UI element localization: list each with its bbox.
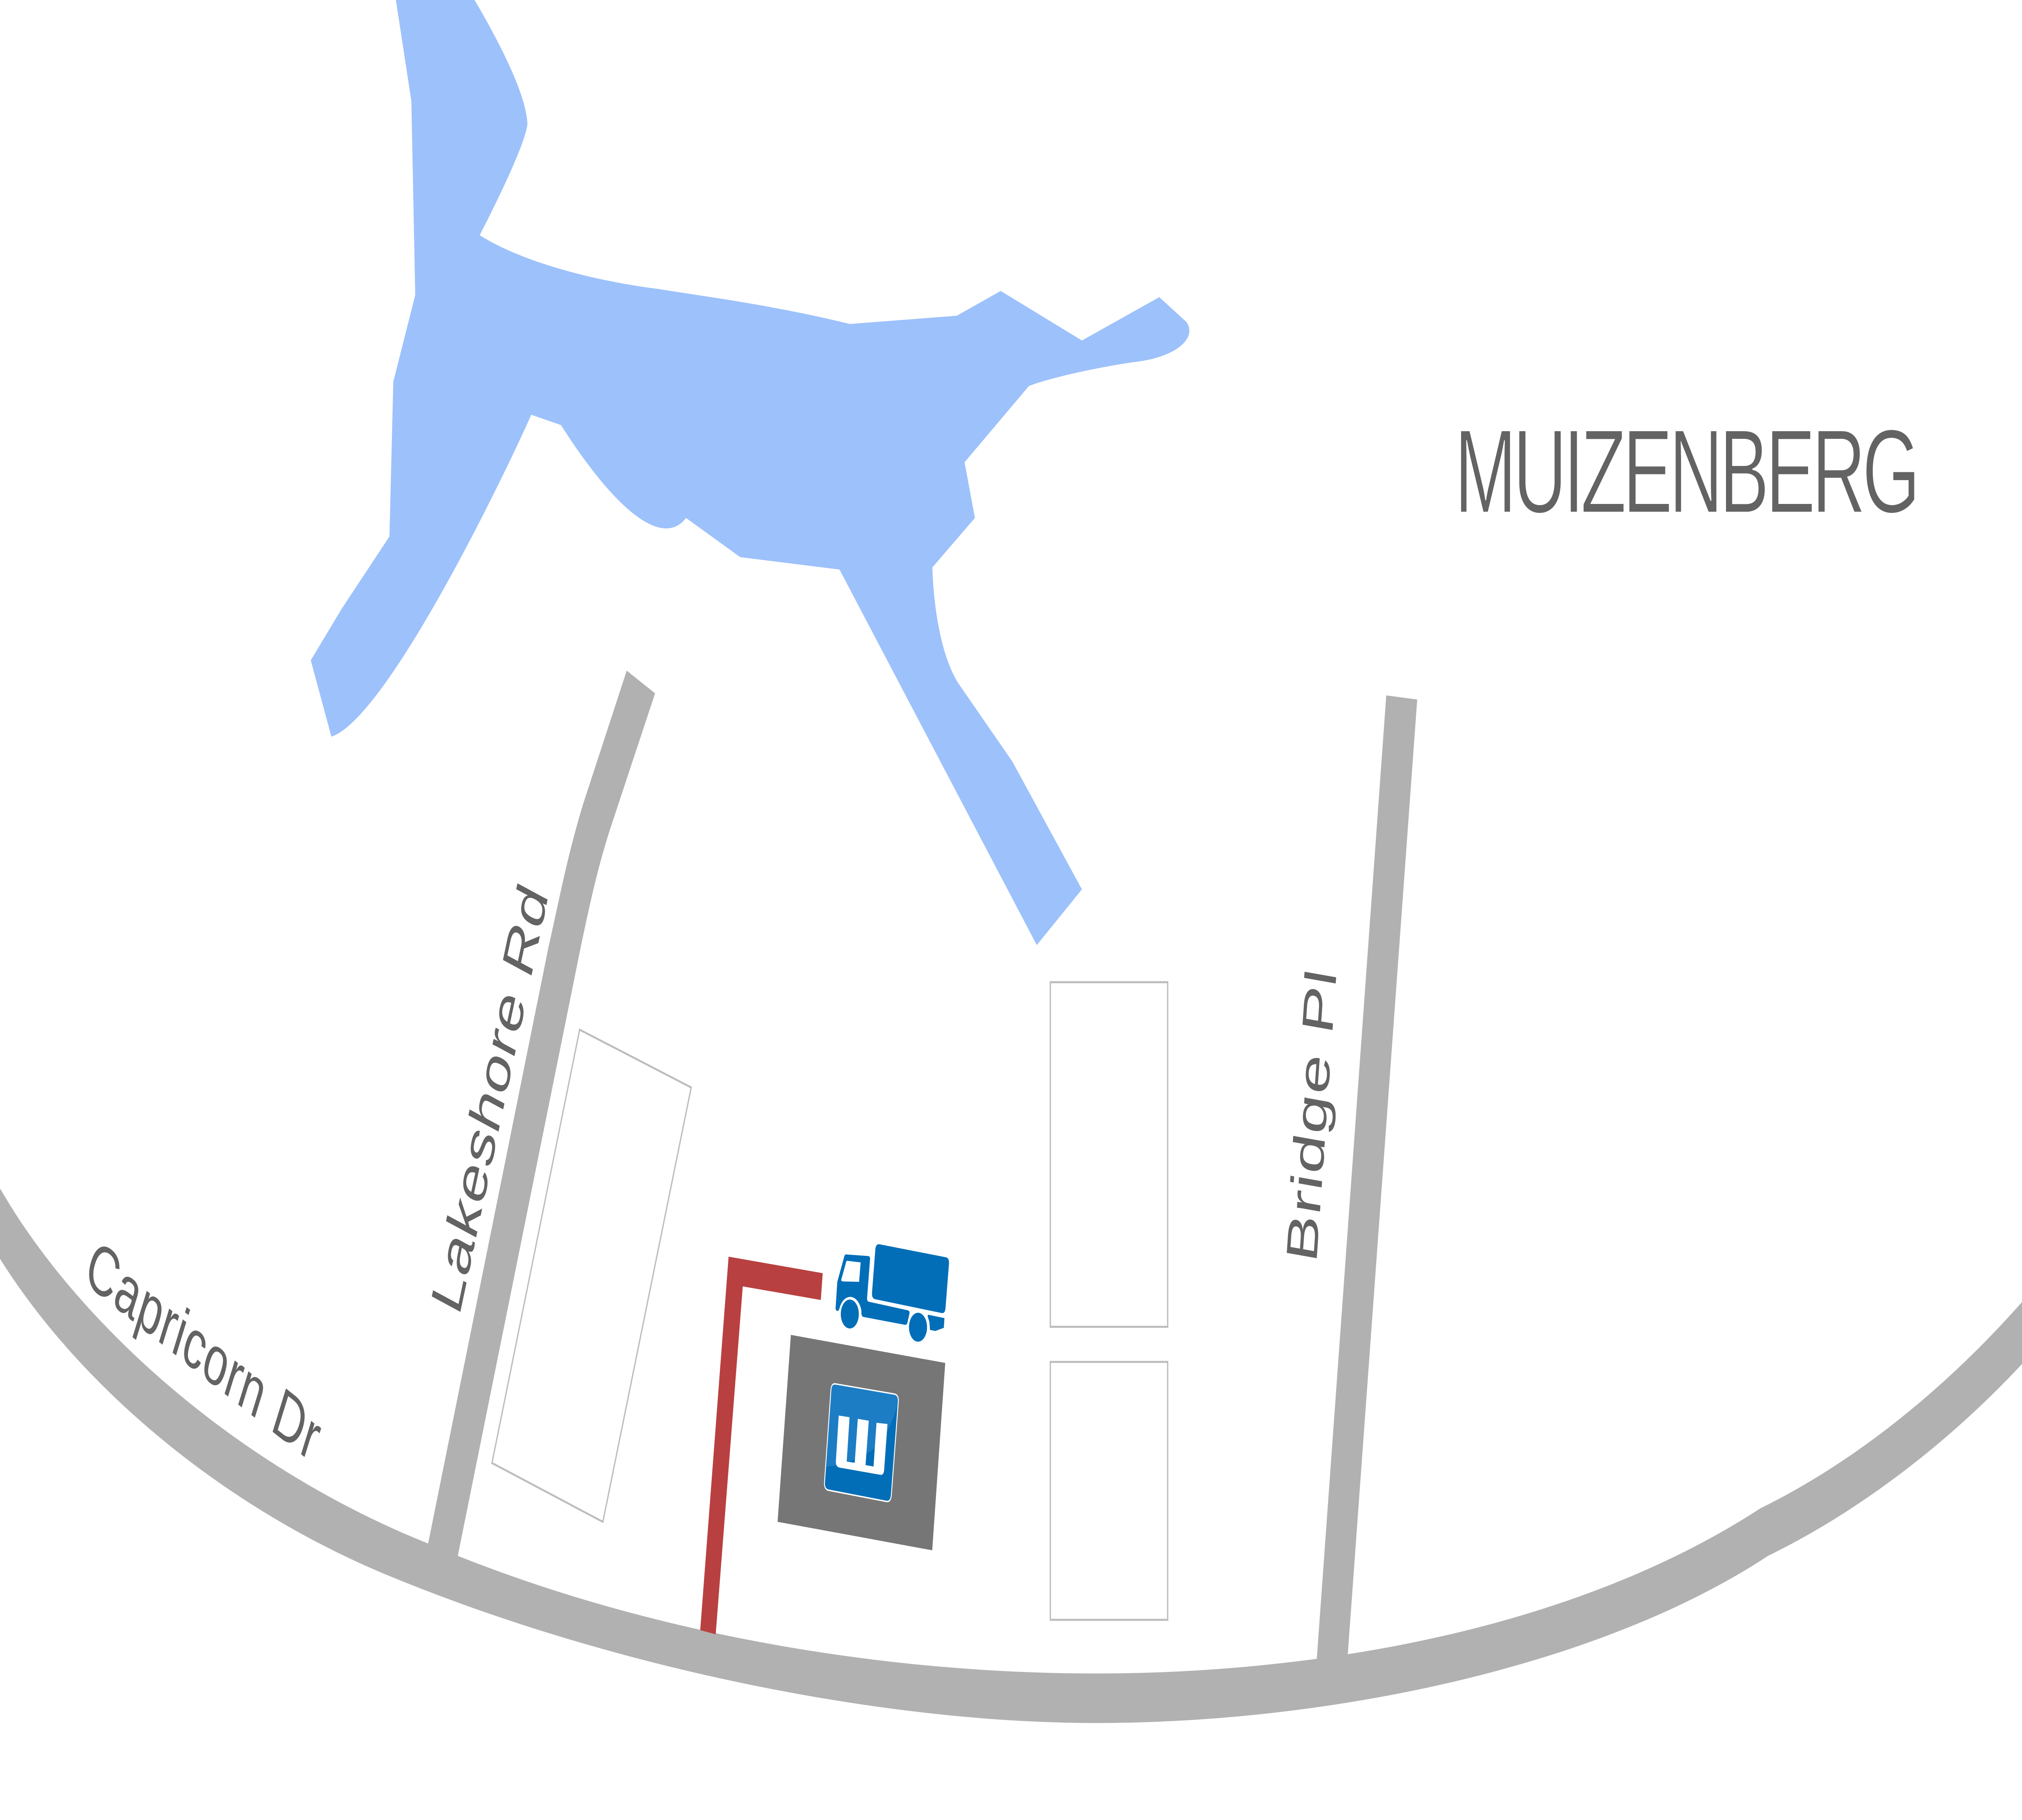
building: grey depot — [778, 1335, 945, 1550]
road label: Capricorn Dr: Capricorn Dr — [78, 1225, 329, 1476]
building outline: south right — [1050, 1362, 1168, 1620]
icon: logo — [825, 1384, 898, 1501]
water body: lake — [311, 0, 1189, 945]
icon: truck — [835, 1244, 949, 1342]
road: Lakeshore Rd — [428, 671, 655, 1579]
road: Capricorn Dr — [0, 1189, 2022, 1723]
road label: Bridge Pl: Bridge Pl — [1277, 966, 1346, 1266]
road label: Lakeshore Rd: Lakeshore Rd — [422, 875, 557, 1322]
building outline: north right — [1050, 982, 1168, 1327]
road: Bridge Pl — [1314, 695, 1417, 1682]
place label: MUIZENBERG: MUIZENBERG — [1455, 405, 1920, 538]
building outline: beside Lakeshore Rd — [492, 1030, 691, 1522]
route: red access road — [700, 1257, 823, 1634]
